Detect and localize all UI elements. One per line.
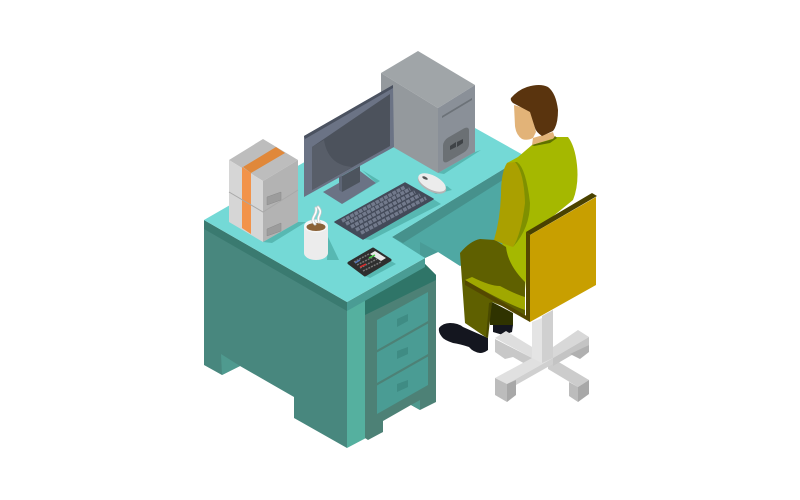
keyboard xyxy=(335,183,441,240)
desk top xyxy=(204,118,525,311)
drawer unit xyxy=(365,264,436,440)
base arm front left xyxy=(495,358,553,402)
tower ports xyxy=(443,125,469,165)
chair seat xyxy=(465,277,530,322)
far leg and shoe xyxy=(488,300,513,335)
monitor shadow xyxy=(342,170,380,204)
chair back xyxy=(526,193,597,322)
neck xyxy=(532,132,555,145)
base arm back left xyxy=(495,331,542,368)
drawer handles xyxy=(397,314,408,392)
tower slot xyxy=(442,98,472,118)
shoe xyxy=(439,323,488,353)
drawer fronts xyxy=(377,292,428,414)
desk body xyxy=(204,225,366,448)
thigh and near leg xyxy=(460,239,525,338)
hair xyxy=(511,85,558,136)
mouse xyxy=(415,169,452,198)
face xyxy=(514,105,536,140)
steam xyxy=(313,207,320,224)
base arm back right xyxy=(553,330,589,366)
monitor xyxy=(304,85,394,204)
storage boxes xyxy=(229,139,306,243)
monitor base xyxy=(323,166,376,204)
base arm front right xyxy=(548,361,589,402)
chair base xyxy=(495,330,589,402)
computer tower xyxy=(381,51,481,174)
head xyxy=(511,85,558,140)
box tape xyxy=(242,147,285,234)
chair xyxy=(495,193,597,402)
man torso xyxy=(500,137,578,290)
desk return panel xyxy=(392,156,525,266)
box labels xyxy=(267,192,281,236)
coffee mug xyxy=(304,207,339,260)
collar xyxy=(532,136,557,146)
calculator xyxy=(349,249,396,278)
chair pole xyxy=(532,310,553,363)
arm xyxy=(494,162,530,247)
